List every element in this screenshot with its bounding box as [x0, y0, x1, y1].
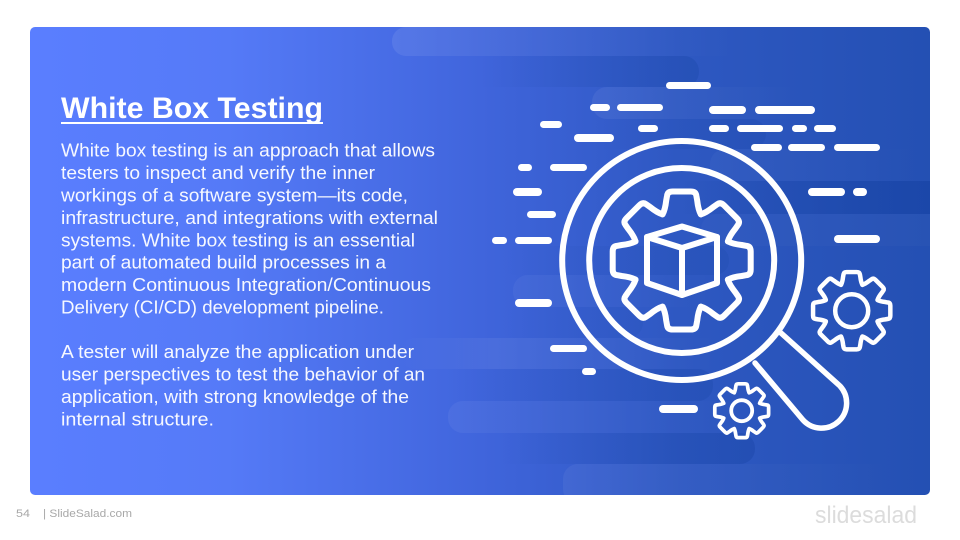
text block: second paragraph: user perspectives to test the behavior of an [61, 364, 425, 384]
title: White Box Testing [61, 92, 323, 125]
text block: first paragraph: workings of a software system—its code, [60, 186, 408, 206]
text block: first paragraph [60, 140, 438, 318]
icon: small gear right [813, 272, 890, 349]
text block: first paragraph: testers to inspect and verify the inner [61, 163, 375, 183]
footer: page number and site: | SlideSalad.com [43, 508, 132, 520]
icon: code lines around magnifier [492, 82, 880, 413]
text block: second paragraph: A tester will analyze the application under [61, 342, 414, 362]
footer: page number and site: 54 [16, 508, 30, 520]
text block: second paragraph: application, with strong knowledge of the [61, 387, 409, 407]
text block: first paragraph: Delivery (CI/CD) development pipeline. [61, 298, 384, 318]
icon: magnifying glass [562, 141, 847, 428]
icon: small gear bottom [715, 384, 769, 438]
text block: first paragraph: modern Continuous Integration/Continuous [61, 275, 431, 295]
text block: second paragraph [61, 342, 425, 430]
text block: first paragraph: infrastructure, and integrations with external [61, 208, 438, 228]
text block: second paragraph: internal structure. [61, 410, 214, 430]
icon: large gear [613, 192, 751, 330]
icon: cube [647, 226, 717, 295]
logo: slidesalad: slidesalad [815, 502, 917, 529]
text block: first paragraph: White box testing is an approach that allows [61, 140, 435, 160]
text block: first paragraph: systems. White box testing is an essential [61, 230, 415, 250]
text block: first paragraph: part of automated build processes in a [61, 252, 387, 272]
